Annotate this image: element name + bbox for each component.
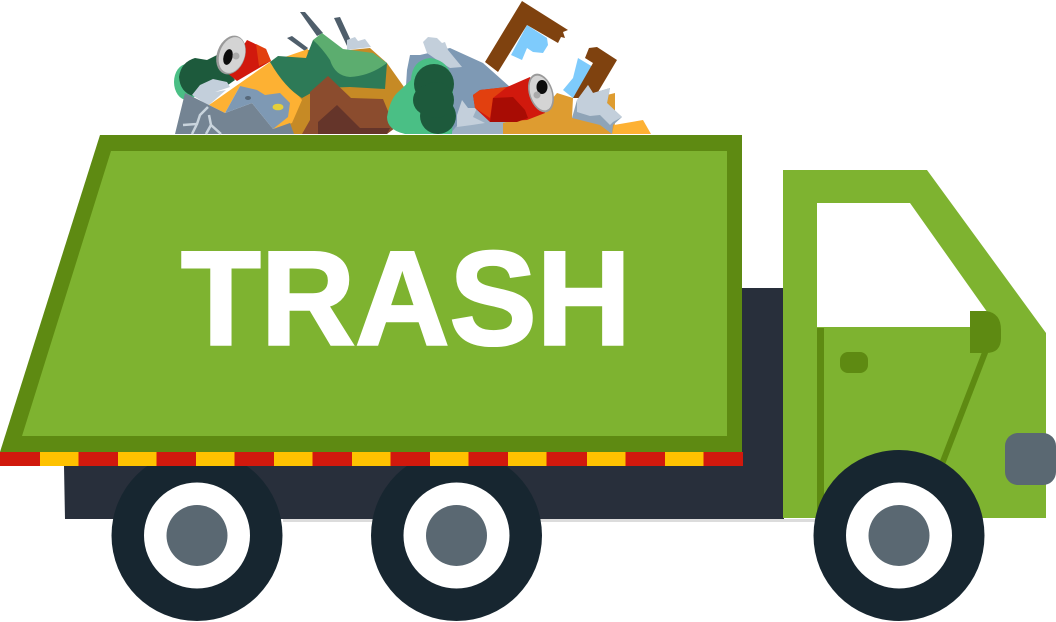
- label: TRASH: TRASH: [181, 224, 631, 374]
- warning stripe: [0, 452, 743, 466]
- icon: golden pile left: [270, 48, 404, 134]
- icon: gray trash bag: [403, 48, 520, 134]
- icon: brown box: [302, 76, 395, 134]
- side mirror: [970, 311, 1001, 353]
- box panel: [22, 151, 727, 436]
- icon: dark green bag: [413, 64, 456, 134]
- wheel: front: [814, 450, 984, 621]
- icon: crumpled paper left: [192, 79, 230, 105]
- icon: yellow spot: [272, 104, 284, 110]
- icon: broken gray stone: [175, 93, 294, 134]
- icon: yellow paper right: [612, 120, 651, 134]
- cab window: [817, 203, 990, 327]
- cab body: [783, 170, 1046, 518]
- icon: golden pile right: [503, 93, 615, 134]
- icon: crumpled paper middle: [457, 100, 485, 127]
- chassis shadow line: [283, 519, 815, 522]
- door handle: [840, 352, 868, 373]
- icon: broken brown frame: [485, 1, 617, 98]
- box frame: [0, 135, 742, 452]
- icon: red soda can right: [473, 70, 559, 122]
- icon: back crumpled paper left: [347, 37, 371, 50]
- door edge: [817, 328, 824, 518]
- icon: blue-gray sheet left: [225, 86, 290, 129]
- icon: crumpled paper right: [572, 85, 622, 134]
- icon: rivet: [245, 96, 251, 100]
- icon: dark green bag left: [179, 55, 235, 96]
- icon: light green bag: [387, 58, 453, 134]
- icon: yellow paper left: [209, 62, 302, 129]
- icon: green tarp: [270, 33, 387, 98]
- truck cab: [783, 170, 1056, 518]
- icon: metal rods: [287, 12, 352, 51]
- wheel: middle: [371, 450, 542, 621]
- bumper: [1005, 433, 1056, 485]
- icon: red soda can left: [211, 31, 271, 81]
- mirror arm: [942, 350, 986, 464]
- wheel: rear: [112, 450, 282, 621]
- trash pile: [174, 1, 651, 134]
- chassis: [64, 288, 784, 519]
- icon: crumpled paper top: [423, 37, 462, 68]
- icon: light green bag left: [174, 64, 200, 100]
